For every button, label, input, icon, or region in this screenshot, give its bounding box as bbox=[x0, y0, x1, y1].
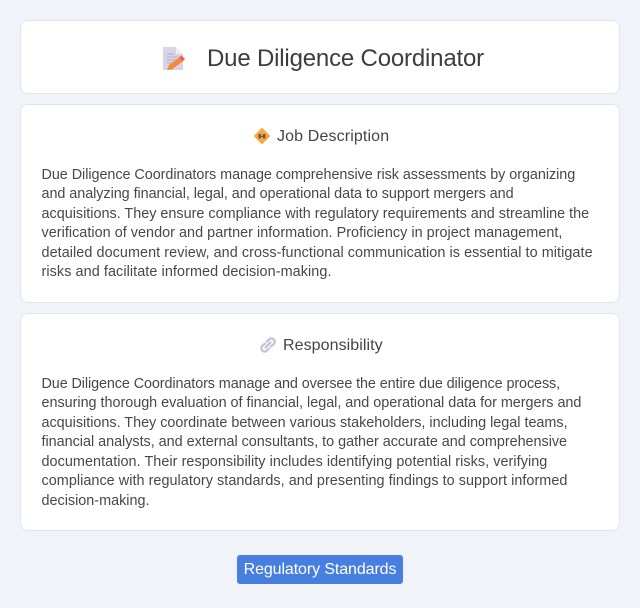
responsibility text: Due Diligence Coordinators manage and oversee the entire due diligence process, bbox=[42, 376, 560, 392]
title card bbox=[20, 20, 620, 94]
responsibility text: documentation. Their responsibility includes identifying potential risks, verifying bbox=[42, 454, 547, 470]
responsibility text: acquisitions. They coordinate between various stakeholders, including legal teams, bbox=[42, 415, 568, 431]
responsibility text: compliance with regulatory standards, and presenting findings to support informed bbox=[42, 473, 567, 489]
heading: responsibility: Responsibility bbox=[283, 337, 383, 354]
job description text: and analyzing financial, legal, and operational data to support mergers and bbox=[42, 186, 514, 202]
job description text: detailed document review, and cross-functional communication is essential to mitigate bbox=[42, 245, 593, 261]
responsibility text: ensuring thorough evaluation of financial, legal, and operational data for mergers and bbox=[42, 395, 581, 411]
responsibility text: decision-making. bbox=[42, 493, 149, 509]
job description text bbox=[42, 167, 593, 280]
icon: document with pencil bbox=[163, 47, 185, 70]
responsibility text bbox=[42, 376, 581, 509]
button: regulatory standards bbox=[237, 555, 403, 584]
panel: responsibility bbox=[20, 313, 620, 531]
job description text: acquisitions. They ensure compliance with regulatory requirements and streamline the bbox=[42, 206, 589, 222]
job description text: risks and facilitate informed decision-making. bbox=[42, 264, 332, 280]
icon: diamond sign bbox=[254, 128, 270, 144]
title: Due Diligence Coordinator bbox=[207, 45, 484, 72]
button: regulatory standards: Regulatory Standards bbox=[244, 561, 396, 578]
job description text: verification of vendor and partner information. Proficiency in project management, bbox=[42, 225, 562, 241]
icon: chain link bbox=[260, 337, 276, 353]
responsibility text: financial analysts, and external consultants, to gather accurate and comprehensive bbox=[42, 434, 567, 450]
job description text: Due Diligence Coordinators manage comprehensive risk assessments by organizing bbox=[42, 167, 575, 183]
panel: job description bbox=[20, 104, 620, 303]
heading: job description: Job Description bbox=[277, 128, 389, 145]
